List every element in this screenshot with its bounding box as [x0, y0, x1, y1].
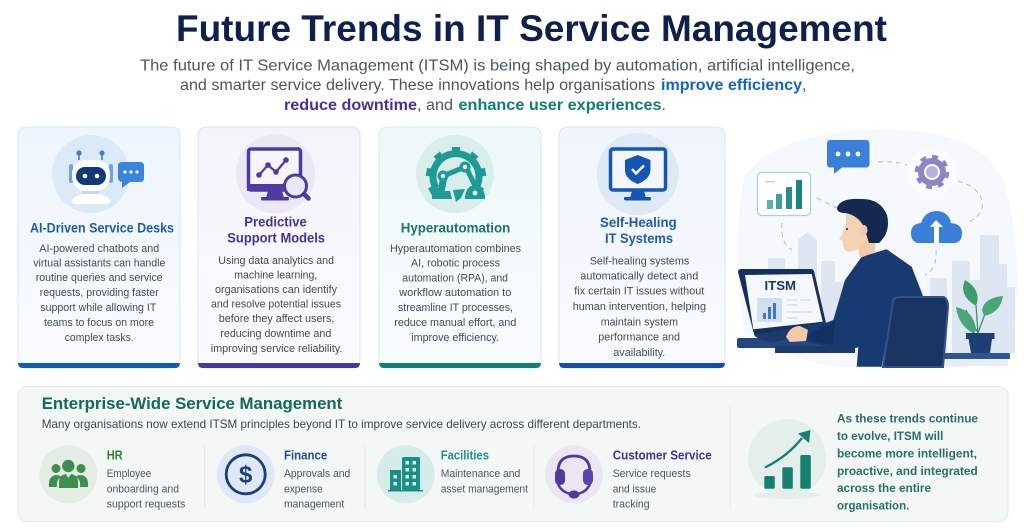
description [441, 468, 528, 495]
laptop: ITSM [764, 278, 796, 293]
description: availability. [613, 347, 665, 359]
intro text: reduce downtime [284, 97, 417, 114]
description: Hyperautomation combines [390, 243, 521, 255]
heading [227, 214, 325, 246]
description: streamline IT processes, [398, 302, 513, 314]
gear [907, 147, 957, 197]
skyline [768, 232, 1015, 353]
heading [600, 214, 677, 246]
heading: AI-Driven Service Desks [30, 220, 174, 236]
closing statement: organisation. [837, 498, 909, 512]
illustration: person working on ITSM laptop [737, 130, 1018, 367]
item: Facilities [377, 445, 528, 503]
title: Future Trends in IT Service Management [176, 8, 887, 49]
chart card [758, 172, 810, 216]
description: performance and [598, 332, 680, 344]
icon: monitor with magnifier [236, 134, 315, 214]
description: complex tasks. [65, 332, 134, 344]
icon: gear with robot arm [416, 135, 494, 213]
laptop [738, 269, 828, 342]
description: reduce manual effort, and [394, 317, 516, 329]
description: Approvals and [284, 468, 350, 480]
intro text: enhance user experiences [458, 97, 662, 114]
chair [883, 297, 948, 367]
description: asset management [441, 483, 528, 495]
heading: Self-Healing [600, 214, 677, 230]
description: before they affect users, [219, 313, 334, 325]
description: improve efficiency. [411, 332, 499, 344]
closing statement: across the entire [837, 481, 931, 495]
intro text: . [662, 97, 666, 114]
description: onboarding and [107, 483, 179, 495]
description: workflow automation to [398, 287, 511, 299]
closing statement [837, 412, 978, 512]
description: automatically detect and [580, 270, 698, 282]
description [33, 243, 165, 344]
description: support while allowing IT [40, 302, 157, 314]
icon: buildings [377, 445, 435, 503]
description: machine learning, [234, 270, 317, 282]
heading: IT Systems [605, 230, 673, 246]
description: management [284, 499, 344, 511]
icon: growth chart [748, 419, 826, 499]
intro text: , [802, 77, 806, 94]
label: Facilities [441, 448, 489, 462]
description: and issue [613, 483, 656, 495]
description: expense [284, 483, 323, 495]
description: Self-healing systems [590, 255, 690, 267]
closing statement: become more intelligent, [837, 447, 977, 461]
description: Using data analytics and [218, 255, 334, 267]
closing statement: proactive, and integrated [837, 464, 978, 478]
icon: dollar coin: $ [239, 462, 253, 488]
icon: robot with chat bubble [52, 135, 144, 213]
closing statement: As these trends continue [837, 412, 978, 426]
item: Customer Service [545, 445, 712, 511]
description: teams to focus on more [44, 317, 154, 329]
panel: AI-Driven Service Desks [18, 127, 180, 368]
label: Finance [284, 448, 327, 462]
description: human intervention, helping [573, 301, 706, 313]
description: AI, robotic process [411, 258, 500, 270]
heading: Enterprise-Wide Service Management [42, 394, 343, 413]
intro text: , and [417, 97, 453, 114]
cloud upload [911, 211, 962, 243]
description [284, 468, 350, 511]
closing statement: to evolve, ITSM will [837, 429, 943, 443]
panel: Hyperautomation [379, 127, 541, 368]
intro text: The future of IT Service Management (ITSM) is being shaped by automation, artificial intelligence, [140, 58, 855, 74]
heading: Support Models [227, 230, 325, 246]
item: HR [39, 445, 186, 511]
description [107, 468, 186, 511]
description: reducing downtime and [220, 328, 331, 340]
description: requests, providing faster [40, 287, 159, 299]
intro text: and smarter service delivery. These innovations help organisations [180, 77, 655, 94]
panel: Enterprise-Wide Service Management [18, 386, 1008, 522]
intro text [140, 58, 855, 114]
description: and resolve potential issues [211, 298, 341, 310]
heading: Hyperautomation [401, 220, 510, 236]
description: Employee [107, 468, 151, 480]
subtext: Many organisations now extend ITSM principles beyond IT to improve service delivery across different departments. [42, 417, 641, 431]
description: fix certain IT issues without [574, 285, 704, 297]
panel: Predictive Support Models [198, 127, 360, 368]
description: virtual assistants can handle [33, 258, 165, 270]
chat bubble [827, 140, 870, 174]
description: support requests [107, 499, 186, 511]
potted plant [956, 280, 1003, 353]
description: AI-powered chatbots and [39, 243, 159, 255]
intro text: improve efficiency [661, 77, 802, 94]
icon: headset [545, 445, 603, 503]
description: organisations can identify [215, 284, 337, 296]
dashed connectors [782, 162, 982, 275]
description: Service requests [613, 468, 691, 480]
label: Customer Service [613, 448, 712, 462]
description [613, 468, 691, 511]
description: Maintenance and [441, 468, 520, 480]
heading: Predictive [244, 214, 307, 230]
description: routine queries and service [36, 272, 163, 284]
description [390, 243, 521, 344]
man [786, 199, 923, 367]
description: automation (RPA), and [402, 272, 508, 284]
description [211, 255, 342, 355]
label: HR [107, 448, 123, 462]
description [573, 255, 706, 359]
panel: Self-Healing IT Systems [559, 127, 725, 368]
icon: people [39, 445, 97, 503]
description: tracking [613, 499, 650, 511]
item: Finance [217, 445, 350, 511]
description: maintain system [601, 316, 678, 328]
description: improving service reliability. [211, 343, 342, 355]
desk [737, 338, 1010, 366]
icon: monitor with shield [597, 133, 679, 215]
